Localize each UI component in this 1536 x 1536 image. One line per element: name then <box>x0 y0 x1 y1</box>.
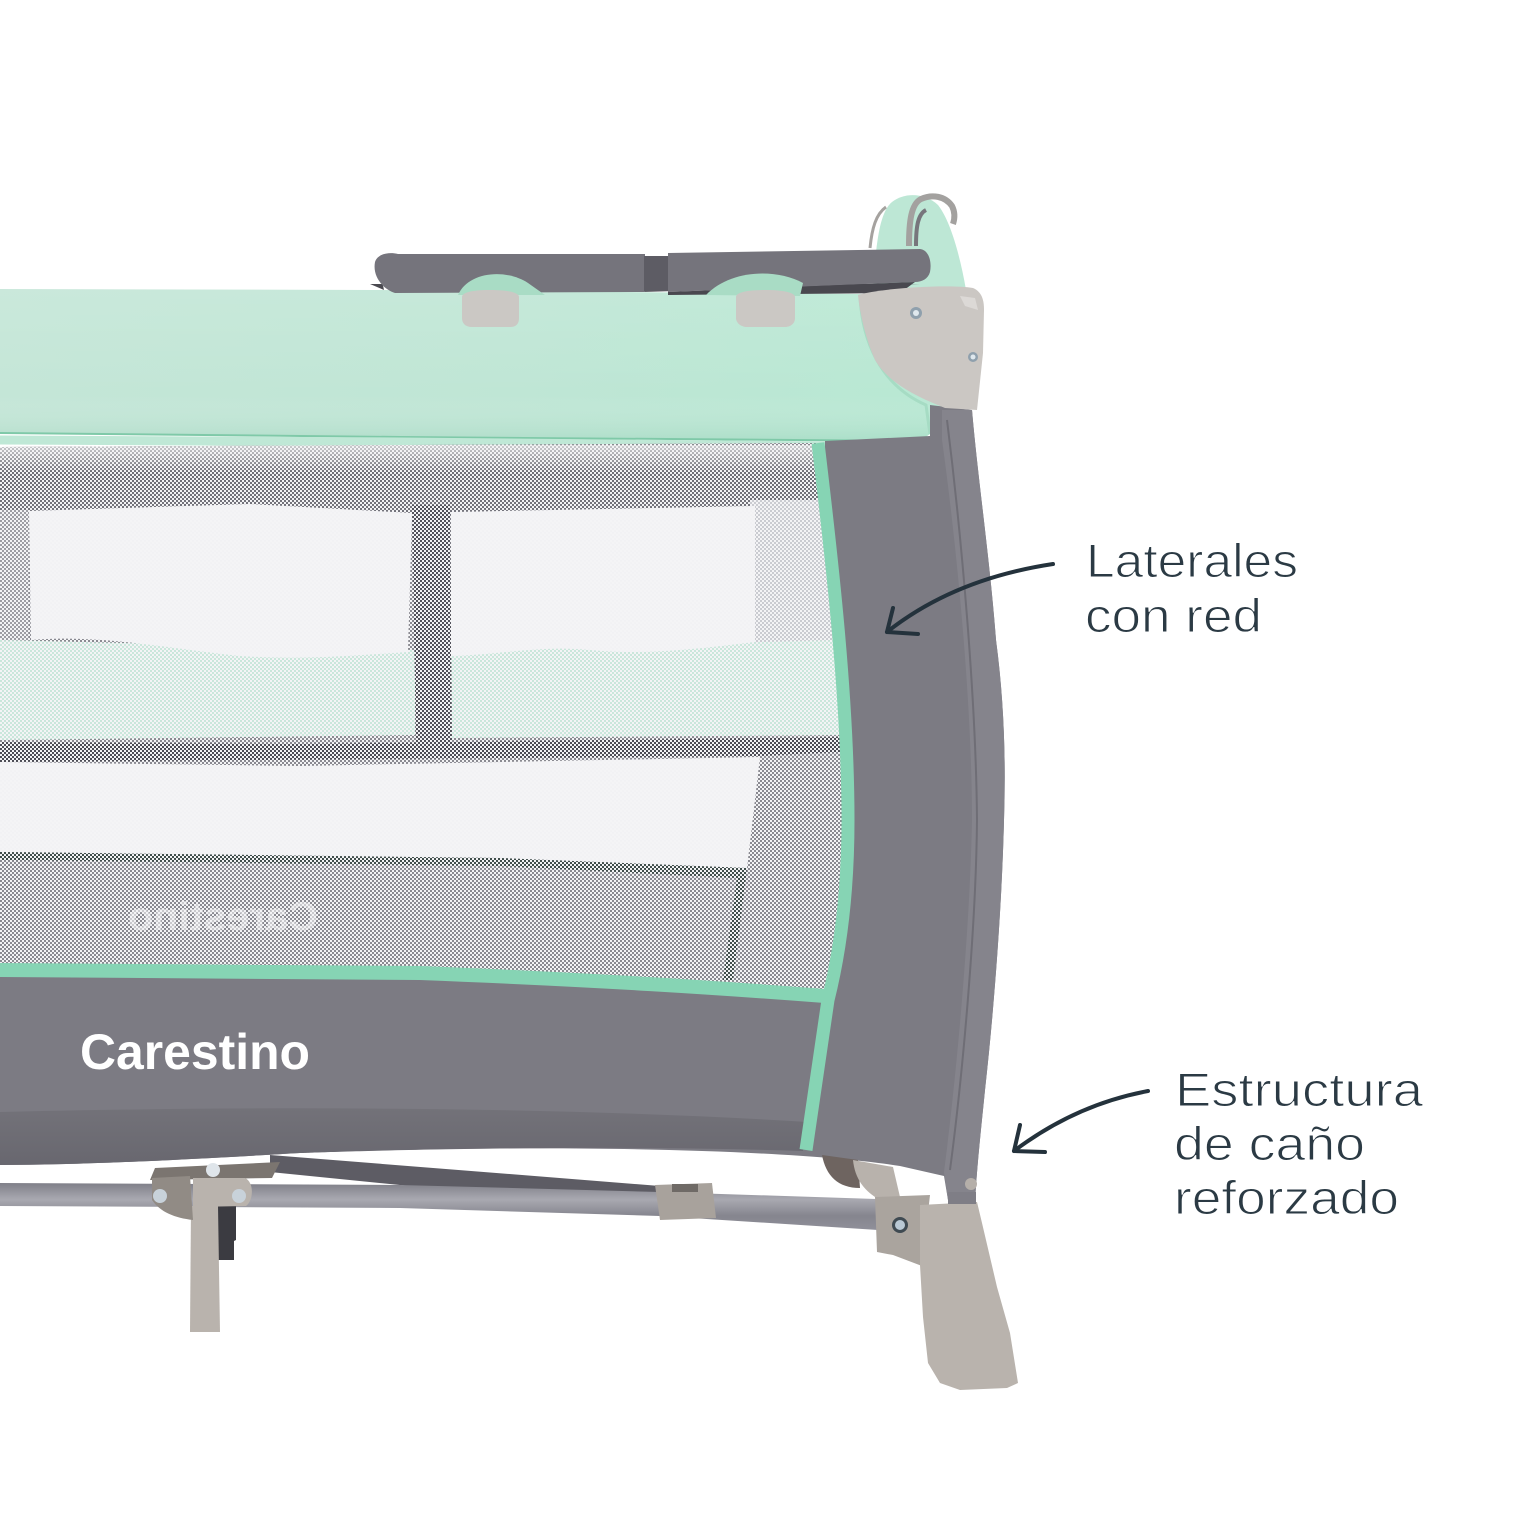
lower window <box>0 757 760 868</box>
lower dark line <box>0 852 747 980</box>
label: estructura de caño reforzado <box>1174 1063 1424 1224</box>
window left <box>29 504 412 658</box>
upper dark band behind mesh <box>0 445 830 515</box>
grey fabric body <box>0 405 1005 1202</box>
left dark sliver <box>0 510 29 640</box>
label: estructura de caño reforzado: Estructura <box>1175 1063 1424 1116</box>
middle rod clip <box>655 1183 716 1220</box>
top handle bar <box>370 249 931 295</box>
top rail green band <box>0 289 945 446</box>
window right <box>451 506 755 656</box>
dark band under green <box>0 737 840 762</box>
side tube <box>942 410 1005 1202</box>
arrow: frame <box>1014 1091 1148 1152</box>
label: laterales con red: con red <box>1085 589 1262 642</box>
mint piping <box>0 443 848 1150</box>
strap clip left <box>458 274 545 327</box>
label: laterales con red: Laterales <box>1086 534 1298 587</box>
mesh side panel <box>0 440 860 1000</box>
corner foot <box>822 1155 1018 1390</box>
arrow: side mesh <box>887 564 1053 634</box>
lower darker seam <box>0 1108 808 1165</box>
upper right pale region <box>750 500 832 642</box>
brand logo: Carestino <box>80 1024 310 1080</box>
product: travel cot <box>0 195 1018 1390</box>
strap clip right <box>706 274 803 327</box>
green mattress area seen through mesh <box>0 640 840 740</box>
label: estructura de caño reforzado: de caño <box>1174 1117 1365 1170</box>
corner cap <box>858 286 984 410</box>
centre post <box>412 505 452 745</box>
centre hinge and leg <box>150 1162 280 1332</box>
rear green loop with metal rails <box>870 195 966 290</box>
front rod <box>0 1183 878 1230</box>
label: laterales con red <box>1085 534 1298 642</box>
mirrored logo through mesh: Carestino <box>128 895 318 939</box>
label: estructura de caño reforzado: reforzado <box>1174 1171 1399 1224</box>
rear rod <box>270 1155 660 1200</box>
